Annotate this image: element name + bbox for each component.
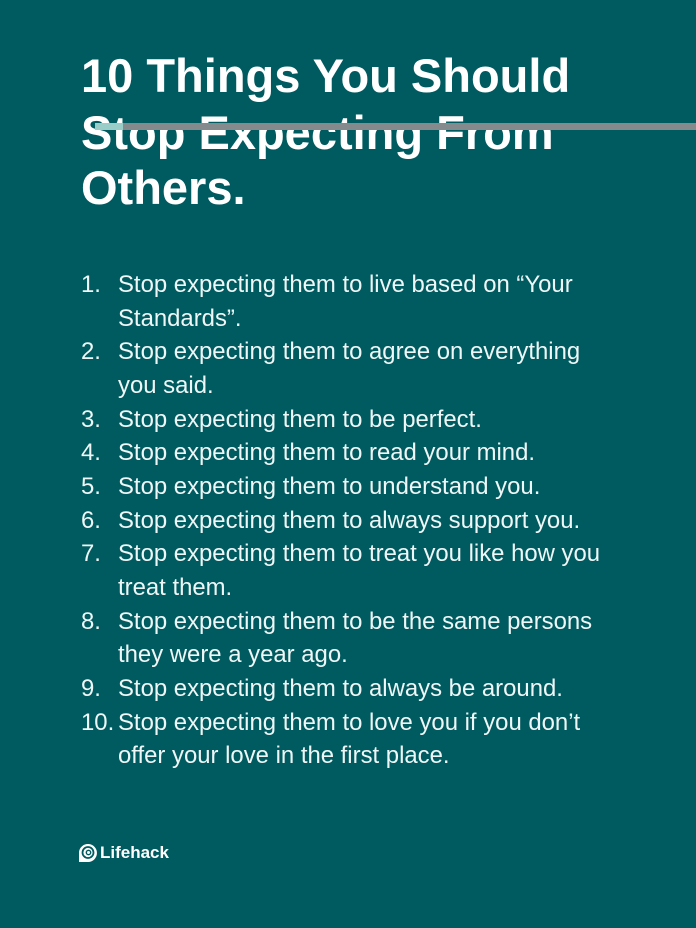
numbered list: Stop expecting them to read your mind. <box>118 439 535 466</box>
numbered list: they were a year ago. <box>118 641 348 668</box>
numbered list: 6. <box>81 507 101 534</box>
numbered list: you said. <box>118 372 214 399</box>
logo wordmark: Lifehack <box>100 843 169 862</box>
title: Others. <box>81 161 246 214</box>
numbered list: 8. <box>81 608 101 635</box>
numbered list: 5. <box>81 473 101 500</box>
progress bar overlay <box>95 123 696 130</box>
numbered list: Stop expecting them to treat you like how you <box>118 540 600 567</box>
numbered list: 2. <box>81 338 101 365</box>
title: 10 Things You Should <box>81 49 570 102</box>
numbered list: Stop expecting them to be perfect. <box>118 406 482 433</box>
numbered list: Stop expecting them to be the same persons <box>118 608 592 635</box>
numbered list: Stop expecting them to live based on “Your <box>118 271 573 298</box>
numbered list: Stop expecting them to love you if you don’t <box>118 709 580 736</box>
numbered list: 4. <box>81 439 101 466</box>
numbered list: Stop expecting them to agree on everything <box>118 338 580 365</box>
icon: Lifehack swirl <box>79 844 97 862</box>
numbered list: 9. <box>81 675 101 702</box>
numbered list <box>81 271 600 769</box>
title: Stop Expecting From <box>81 106 554 159</box>
numbered list: 1. <box>81 271 101 298</box>
numbered list: 10. <box>81 709 114 736</box>
numbered list: Stop expecting them to understand you. <box>118 473 540 500</box>
title <box>81 49 570 214</box>
numbered list: offer your love in the first place. <box>118 742 450 769</box>
numbered list: Stop expecting them to always be around. <box>118 675 563 702</box>
numbered list: 7. <box>81 540 101 567</box>
numbered list: Standards”. <box>118 305 242 332</box>
numbered list: treat them. <box>118 574 232 601</box>
numbered list: Stop expecting them to always support you. <box>118 507 580 534</box>
numbered list: 3. <box>81 406 101 433</box>
logo: Lifehack <box>79 843 169 862</box>
